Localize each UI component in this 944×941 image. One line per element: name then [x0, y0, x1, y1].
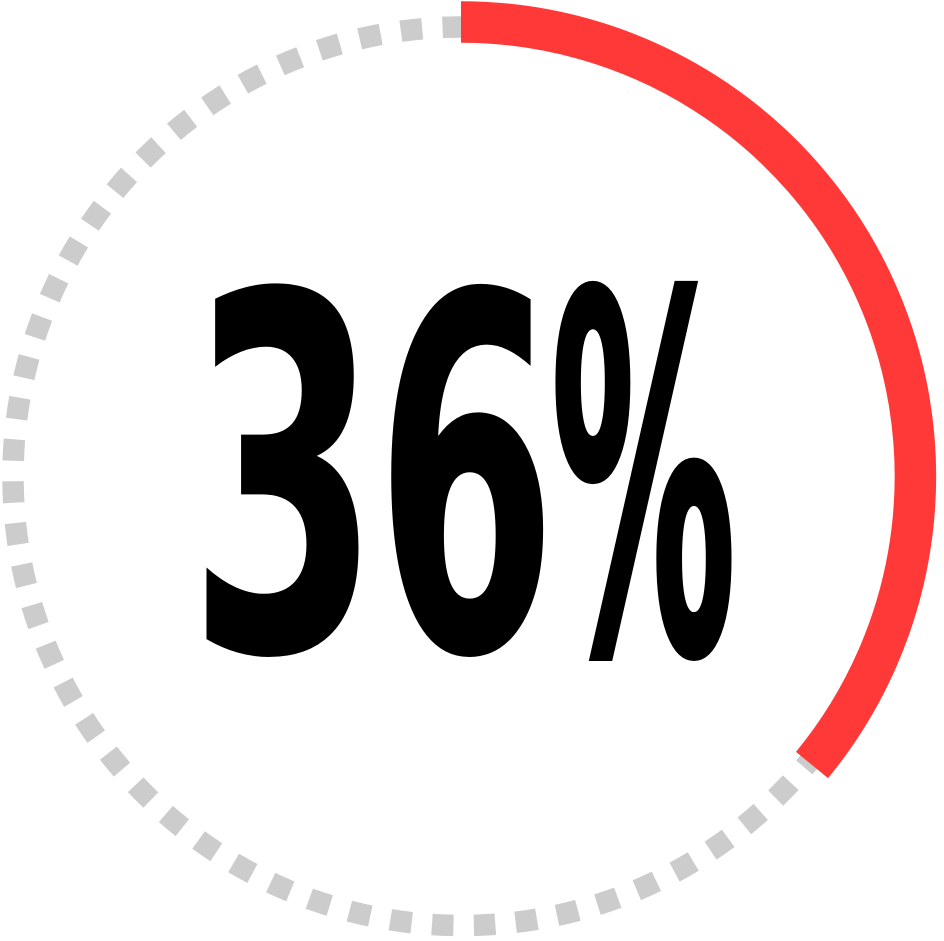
percentage value: % [551, 193, 736, 767]
percentage value: 6 [375, 193, 557, 767]
percentage value [188, 192, 736, 767]
filled portion: red arc [461, 22, 915, 765]
percentage value: 3 [188, 192, 380, 767]
